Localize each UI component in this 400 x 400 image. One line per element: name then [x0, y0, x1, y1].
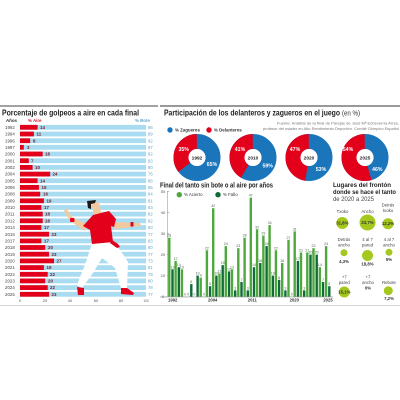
- x axis years: 1992: [168, 298, 178, 302]
- y axis: 40: [161, 210, 166, 215]
- bar chart rows: 2011: [5, 212, 15, 217]
- bar value labels: 16: [280, 259, 284, 263]
- bar chart rows: 2008: [5, 192, 15, 197]
- bar chart rows: 2020: [5, 258, 15, 263]
- bar value labels: 42: [211, 204, 215, 208]
- bar value labels: 0: [187, 292, 189, 296]
- bar chart rows: 20: [48, 245, 53, 250]
- bar chart rows: 2014: [5, 225, 15, 230]
- x axis labels: 20: [43, 298, 48, 303]
- place: 4 to 7 ancho: [383, 237, 395, 262]
- place: rebound: [382, 280, 397, 301]
- place: over 7 ancho: [362, 274, 374, 290]
- bar chart rows: 85: [148, 185, 153, 190]
- donut: 2020: 53%: [316, 167, 327, 173]
- donut: 2020: 2020: [304, 155, 315, 161]
- place: over 7 ancho: +7: [366, 274, 371, 280]
- place: 4 to 7 wall: 4 al 7: [362, 237, 373, 242]
- y axis: 20: [161, 252, 166, 257]
- place: ancho: [360, 209, 376, 230]
- table header: % Aire: [28, 118, 42, 123]
- donut: 2025: 2025: [360, 155, 371, 161]
- donut: 2010: [231, 135, 275, 180]
- bar chart rows: 17: [44, 205, 49, 210]
- x axis labels: 60: [94, 298, 99, 303]
- bar value labels: 14: [252, 263, 256, 267]
- bar value labels: 12: [227, 267, 231, 271]
- bar chart rows: 2015: [5, 232, 15, 237]
- bar chart rows: 73: [148, 258, 153, 263]
- place: 4 to 7 ancho: 4 al 7: [384, 237, 395, 242]
- bar value labels: 5: [328, 282, 330, 286]
- place: over 7 wall: 15,1%: [338, 290, 351, 294]
- place: behind ancho: [338, 237, 350, 264]
- bar chart rows: 15: [42, 185, 47, 190]
- panel: percentage of air strokes per final: [2, 108, 153, 303]
- bar chart rows: 81: [148, 265, 153, 270]
- bar chart rows: 80: [148, 245, 153, 250]
- legend: hit and miss: % Fallo: [223, 192, 238, 197]
- bar chart rows: 78: [148, 272, 153, 277]
- place: rebound: 7,2%: [384, 296, 394, 301]
- bar chart rows: 2001: [5, 158, 15, 163]
- bar value labels: 22: [274, 246, 278, 250]
- bar value labels: 28: [167, 234, 171, 238]
- place: 4 to 7 wall: [361, 237, 374, 266]
- bar value labels: 10: [196, 272, 200, 276]
- bar chart rows: 83: [148, 225, 153, 230]
- bar chart rows: 2022: [5, 272, 15, 277]
- heading unit: (en %): [342, 108, 360, 118]
- source note: Fuente: Análisis de la final de Parejas de José Mª Echeverría Arrés,: [277, 120, 399, 126]
- y axis: 10: [161, 273, 166, 278]
- bar value labels: 7: [240, 278, 242, 282]
- place: over 7 ancho: 0%: [365, 286, 371, 290]
- bar value labels: 3: [234, 286, 236, 290]
- place: over 7 wall: [338, 274, 351, 298]
- heading: places: [333, 182, 396, 196]
- bar chart rows: 2019: [5, 252, 15, 257]
- legend: players: [167, 127, 242, 133]
- place: 4 to 7 ancho: 5%: [386, 257, 392, 262]
- bar chart rows: 86: [148, 125, 153, 130]
- bar value labels: 7: [322, 278, 324, 282]
- bar chart rows: 81: [148, 198, 153, 203]
- bar chart rows: 2000: [5, 152, 15, 157]
- bar chart rows: 1997: [5, 145, 15, 150]
- heading dates: de 2020 a 2025: [333, 197, 375, 203]
- panel: places on the court: [333, 182, 397, 301]
- bar chart rows: 83: [148, 238, 153, 243]
- source note: [263, 120, 399, 131]
- bar chart rows: 14: [40, 178, 45, 183]
- bar chart rows: 18: [45, 152, 50, 157]
- place: ancho: Ancho: [361, 209, 374, 214]
- donut: 2025: 46%: [372, 167, 383, 173]
- place: 4 to 7 wall: pared: [362, 243, 374, 248]
- bar chart rows: 2025: [5, 292, 15, 297]
- bar value labels: 15: [221, 261, 225, 265]
- place: over 7 wall: +7: [342, 274, 347, 280]
- donut: 2010: 59%: [263, 164, 273, 170]
- bar chart rows: 2002: [5, 165, 15, 170]
- bar chart rows: 19: [46, 265, 52, 270]
- y axis: 30: [161, 231, 166, 236]
- bar chart rows: 93: [148, 158, 153, 163]
- bar value labels: 47: [249, 194, 253, 198]
- x axis years: 2025: [323, 298, 333, 302]
- donut: 1992: 1992: [192, 155, 203, 161]
- bar chart rows: 77: [148, 292, 153, 297]
- table header: Años: [6, 118, 18, 123]
- bars: light is hit, dark is miss: [168, 198, 330, 297]
- x axis years: 2020: [290, 298, 300, 302]
- bar value labels: 3: [247, 286, 249, 290]
- x axis years: 2004: [208, 298, 218, 302]
- bar value labels: 0: [184, 292, 186, 296]
- place: behind txoko: 12,2%: [382, 221, 394, 226]
- bar chart rows: 2023: [5, 278, 15, 283]
- bar chart rows: 19: [46, 198, 52, 203]
- place: behind ancho: ancho: [338, 243, 350, 248]
- x axis labels: 40: [68, 298, 73, 303]
- donut: 2025: [343, 138, 384, 177]
- y axis: 50: [161, 189, 166, 194]
- bar value labels: 16: [258, 259, 262, 263]
- heading: air strokes: Porcentaje de golpeos a aire en cada final: [2, 108, 139, 118]
- bar chart rows: 11: [36, 132, 42, 137]
- bar chart rows: 17: [44, 238, 49, 243]
- x axis years: 2011: [248, 298, 258, 302]
- donut: 2010: 2010: [248, 155, 259, 161]
- panel: finish without bounce per year: [160, 180, 333, 302]
- bar chart rows: 1994: [5, 132, 15, 137]
- place: over 7 wall: pared: [339, 280, 350, 285]
- bar value labels: 24: [265, 242, 269, 246]
- legend: hit and miss: % Acierto: [184, 192, 203, 197]
- place: behind txoko: [382, 202, 394, 229]
- bar chart rows: 77: [148, 252, 153, 257]
- bar chart rows: 76: [148, 172, 153, 177]
- heading: finish: Final del tanto sin bote o al aire por años: [160, 180, 273, 190]
- bar chart rows: 78: [148, 285, 153, 290]
- donut: 2020: 47%: [290, 147, 301, 153]
- bar chart rows: 17: [44, 225, 49, 230]
- place: txoko: 31,8%: [336, 220, 349, 226]
- bar value labels: 10: [214, 272, 218, 276]
- bar value labels: 22: [205, 246, 209, 250]
- bar chart rows: 80: [148, 278, 153, 283]
- legend: players: % Delanteros: [214, 128, 242, 132]
- legend: players: % Zagueros: [175, 128, 200, 132]
- donut: 2020: [290, 139, 328, 176]
- bar chart rows: 2010: [5, 205, 15, 210]
- bar value labels: 29: [261, 232, 265, 236]
- x axis labels: 80: [119, 298, 124, 303]
- bar value labels: 32: [255, 225, 259, 229]
- bar chart rows: 97: [148, 145, 153, 150]
- x axis labels: [19, 298, 149, 303]
- legend: hit and miss: [177, 192, 238, 197]
- bar value labels: 24: [324, 242, 328, 246]
- bar value labels: 13: [230, 265, 234, 269]
- bar chart rows: 92: [148, 138, 153, 143]
- place: txoko: Txoko: [337, 209, 349, 214]
- table header: % Bote: [135, 118, 150, 123]
- x axis years: [168, 298, 333, 302]
- bar value labels: 20: [308, 251, 312, 255]
- bar value labels: 3: [303, 286, 305, 290]
- bar chart rows: 2005: [5, 178, 15, 183]
- bar chart rows: 3: [27, 145, 30, 150]
- bar value labels: 27: [286, 236, 290, 240]
- bar chart rows: 2017: [5, 238, 15, 243]
- donut: 1992: 65%: [207, 162, 218, 168]
- bar chart rows: 77: [148, 232, 153, 237]
- bar chart rows: 84: [148, 192, 153, 197]
- bar value labels: 3: [284, 286, 286, 290]
- place: behind ancho: Detrás: [338, 237, 350, 242]
- place: over 7 ancho: ancho: [362, 280, 374, 285]
- place: txoko: [336, 209, 349, 229]
- bar chart rows: 10: [35, 165, 40, 170]
- bar chart rows: 23: [52, 232, 57, 237]
- bar chart rows: 2004: [5, 172, 15, 177]
- bar value labels: 0: [193, 292, 195, 296]
- bar value labels: 28: [243, 234, 247, 238]
- bar chart rows: 1996: [5, 138, 15, 143]
- bar chart rows: 2009: [5, 198, 15, 203]
- bar chart rows: 2012: [5, 218, 15, 223]
- bar value labels: 20: [315, 251, 319, 255]
- bar value labels: 34: [268, 221, 272, 225]
- donut: 1992: [175, 135, 219, 180]
- bar chart rows: 83: [148, 205, 153, 210]
- bar value labels: 8: [278, 276, 280, 280]
- bar chart rows: 16: [43, 192, 48, 197]
- bar value labels: 11: [218, 270, 221, 274]
- heading: participation: Participación de los delanteros y zagueros en el juego: [164, 108, 340, 118]
- bar chart rows: 8: [33, 138, 36, 143]
- bar chart rows: [5, 125, 153, 297]
- bar chart rows: 18: [45, 218, 50, 223]
- bar chart rows: 22: [50, 285, 55, 290]
- place: 4 to 7 ancho: ancho: [383, 243, 395, 248]
- bar value labels: 14: [177, 263, 181, 267]
- bar value labels: 13: [170, 265, 174, 269]
- bar chart rows: 23: [52, 292, 57, 297]
- bar value labels: 9: [200, 274, 202, 278]
- bar chart rows: 2021: [5, 265, 15, 270]
- bar value labels: 21: [299, 248, 303, 252]
- bar value labels: 23: [312, 244, 316, 248]
- bar value labels: 10: [271, 272, 275, 276]
- panel: forwards and backs participation: [164, 108, 399, 180]
- bar chart rows: 1992: [5, 125, 15, 130]
- bar value labels: [167, 194, 330, 296]
- bar chart rows: 86: [148, 178, 153, 183]
- place: behind txoko: Detrás: [382, 202, 394, 208]
- bar value labels: 6: [190, 280, 192, 284]
- bar chart rows: 20: [48, 278, 53, 283]
- place: behind txoko: txoko: [383, 208, 394, 213]
- donut: 2025: 54%: [343, 147, 354, 153]
- bar chart rows: 18: [45, 212, 50, 217]
- bar chart rows: 82: [148, 212, 153, 217]
- bar chart rows: 27: [56, 258, 62, 263]
- place: 4 to 7 wall: 18,8%: [361, 262, 374, 266]
- bar chart rows: 82: [148, 152, 153, 157]
- y axis: 0: [162, 294, 165, 299]
- donut: 1992: 35%: [179, 147, 189, 153]
- bar chart rows: 2024: [5, 285, 15, 290]
- y axis: [160, 189, 333, 299]
- bar value labels: 0: [203, 292, 205, 296]
- place: rebound: Rebote: [382, 280, 397, 285]
- place: behind ancho: 4,3%: [339, 259, 349, 264]
- bar chart rows: 14: [40, 125, 45, 130]
- bar value labels: 14: [318, 263, 322, 267]
- bar value labels: 23: [236, 244, 240, 248]
- bar value labels: 0: [291, 292, 293, 296]
- table header: [6, 118, 150, 123]
- x axis labels: 0: [19, 298, 22, 303]
- bar chart rows: 90: [148, 165, 153, 170]
- place: ancho: 23,7%: [361, 220, 374, 225]
- bar chart rows: 24: [52, 172, 58, 177]
- bar value labels: 21: [305, 248, 309, 252]
- bar chart rows: 82: [148, 218, 153, 223]
- bar value labels: 17: [296, 257, 300, 261]
- bar chart rows: 2006: [5, 185, 15, 190]
- illustration: pelota player: [64, 200, 141, 295]
- bar chart rows: 89: [148, 132, 153, 137]
- heading: places: Lugares del frontón: [333, 182, 391, 189]
- bar value labels: 13: [180, 265, 184, 269]
- bar chart rows: 2018: [5, 245, 15, 250]
- donut: 2010: 41%: [235, 147, 246, 153]
- bar value labels: 31: [293, 227, 297, 231]
- bar value labels: 24: [224, 242, 228, 246]
- bar chart rows: 23: [52, 252, 57, 257]
- source note: profesor del máster en Alto Rendimiento Deportivo. Comité Olímpico Español: [263, 126, 399, 131]
- bar value labels: 5: [209, 282, 211, 286]
- x axis labels: 100: [144, 298, 149, 303]
- bar chart rows: 7: [31, 158, 34, 163]
- bar value labels: 17: [174, 257, 178, 261]
- bar chart rows: 22: [50, 272, 55, 277]
